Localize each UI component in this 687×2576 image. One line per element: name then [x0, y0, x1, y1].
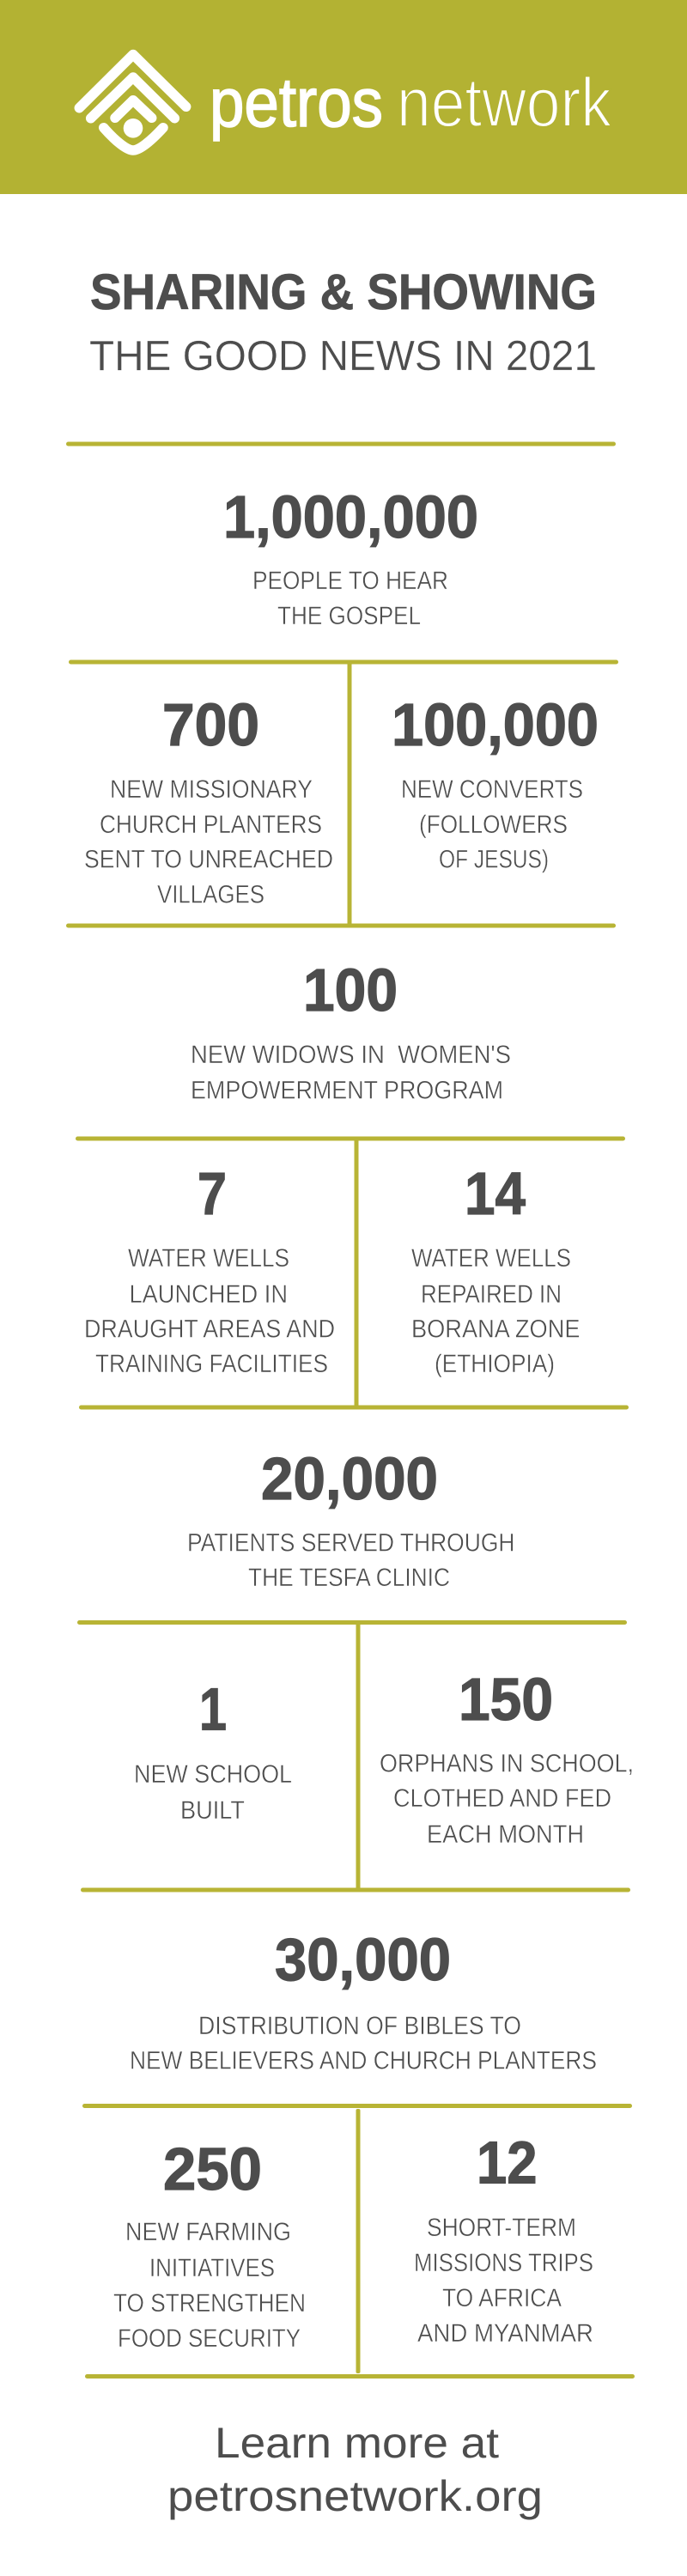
call to action: Learn more at: [215, 2419, 499, 2467]
stat: 100 widows: EMPOWERMENT PROGRAM: [191, 1077, 503, 1104]
stat: 7: WATER WELLS: [128, 1244, 289, 1273]
stat: 700: SENT TO UNREACHED: [84, 845, 333, 874]
stat: 250: NEW FARMING: [125, 2218, 291, 2246]
stat: 150: CLOTHED AND FED: [393, 1784, 611, 1813]
stat: 700: VILLAGES: [157, 881, 264, 908]
stat: 20,000 patients: [187, 1445, 515, 1592]
stat: 14: BORANA ZONE: [411, 1315, 581, 1343]
stat: 150: ORPHANS IN SCHOOL,: [380, 1750, 634, 1777]
stat: 30,000 bibles: DISTRIBUTION OF BIBLES TO: [198, 2012, 521, 2040]
stat: 250: TO STRENGTHEN: [113, 2289, 306, 2318]
stat: 1,000,000 people: [223, 483, 478, 630]
stat: 250: INITIATIVES: [149, 2254, 275, 2282]
stat: 30,000 bibles: 30,000: [275, 1926, 451, 1993]
stat: 30,000 bibles: NEW BELIEVERS AND CHURCH PLANTERS: [130, 2047, 597, 2075]
icon: petros network logo mark: [79, 55, 186, 150]
panel: water wells: [76, 1137, 629, 1410]
stat: 12: MISSIONS TRIPS: [414, 2249, 593, 2277]
stat: 100,000: 100,000: [392, 691, 599, 758]
stat: 30,000 bibles: [130, 1926, 597, 2075]
stat: 12: AND MYANMAR: [417, 2319, 593, 2348]
title: SHARING & SHOWING: [90, 264, 597, 320]
stat: 700: [84, 691, 333, 908]
logo wordmark: network: [397, 64, 611, 142]
stat: 7: DRAUGHT AREAS AND: [84, 1315, 335, 1343]
stat: 1,000,000 people: THE GOSPEL: [277, 602, 421, 630]
stat: 150: 150: [459, 1666, 553, 1733]
stat: 100 widows: 100: [303, 957, 398, 1024]
stat: 14: REPAIRED IN: [421, 1280, 562, 1309]
stat: 1: 1: [199, 1676, 227, 1743]
stat: 100 widows: [191, 957, 511, 1104]
stat: 100,000: OF JESUS): [439, 845, 549, 874]
stat: 7: [84, 1160, 335, 1378]
stat: 12: 12: [477, 2129, 538, 2196]
stat: 20,000 patients: 20,000: [261, 1445, 438, 1512]
panel: farming and missions trips: [82, 2104, 635, 2379]
stat: 250: [113, 2136, 306, 2353]
stat: 20,000 patients: PATIENTS SERVED THROUGH: [187, 1528, 515, 1558]
stat: 700: 700: [162, 691, 259, 758]
panel: school and orphans: [77, 1620, 634, 1893]
stat: 1: NEW SCHOOL: [134, 1760, 292, 1789]
stat: 7: 7: [198, 1160, 227, 1227]
stat: 250: 250: [163, 2136, 262, 2202]
stat: 100 widows: NEW WIDOWS IN WOMEN'S: [191, 1041, 511, 1069]
logo wordmark: petros: [210, 64, 383, 142]
stat: 14: (ETHIOPIA): [435, 1350, 555, 1378]
stat: 12: [414, 2129, 593, 2348]
header band with logo: [0, 0, 687, 194]
divider: [66, 441, 616, 447]
panel: missionaries and converts: [66, 659, 618, 927]
stat: 1: BUILT: [180, 1796, 245, 1825]
stat: 14: WATER WELLS: [411, 1244, 571, 1273]
stat: 7: TRAINING FACILITIES: [95, 1350, 328, 1378]
title: [89, 264, 597, 380]
stat: 250: FOOD SECURITY: [118, 2324, 301, 2353]
stat: 700: NEW MISSIONARY: [110, 775, 313, 804]
stat: 100,000: NEW CONVERTS: [401, 775, 583, 804]
stat: 700: CHURCH PLANTERS: [100, 811, 322, 839]
stat: 7: LAUNCHED IN: [129, 1280, 288, 1309]
stat: 100,000: [392, 691, 599, 874]
stat: 12: SHORT-TERM: [427, 2214, 576, 2242]
stat: 150: EACH MONTH: [427, 1820, 584, 1849]
call to action: [167, 2419, 543, 2520]
stat: 14: 14: [465, 1160, 526, 1227]
title: THE GOOD NEWS IN 2021: [89, 333, 597, 380]
stat: 20,000 patients: THE TESFA CLINIC: [248, 1564, 450, 1592]
stat: 150: [380, 1666, 634, 1849]
stat: 1,000,000 people: 1,000,000: [223, 483, 478, 550]
call to action: petrosnetwork.org: [167, 2472, 543, 2520]
stat: 12: TO AFRICA: [442, 2284, 562, 2312]
stat: 100,000: (FOLLOWERS: [419, 811, 568, 839]
stat: 1: [134, 1676, 292, 1825]
stat: 14: [411, 1160, 581, 1378]
logo wordmark: [210, 64, 611, 142]
stat: 1,000,000 people: PEOPLE TO HEAR: [252, 567, 448, 595]
